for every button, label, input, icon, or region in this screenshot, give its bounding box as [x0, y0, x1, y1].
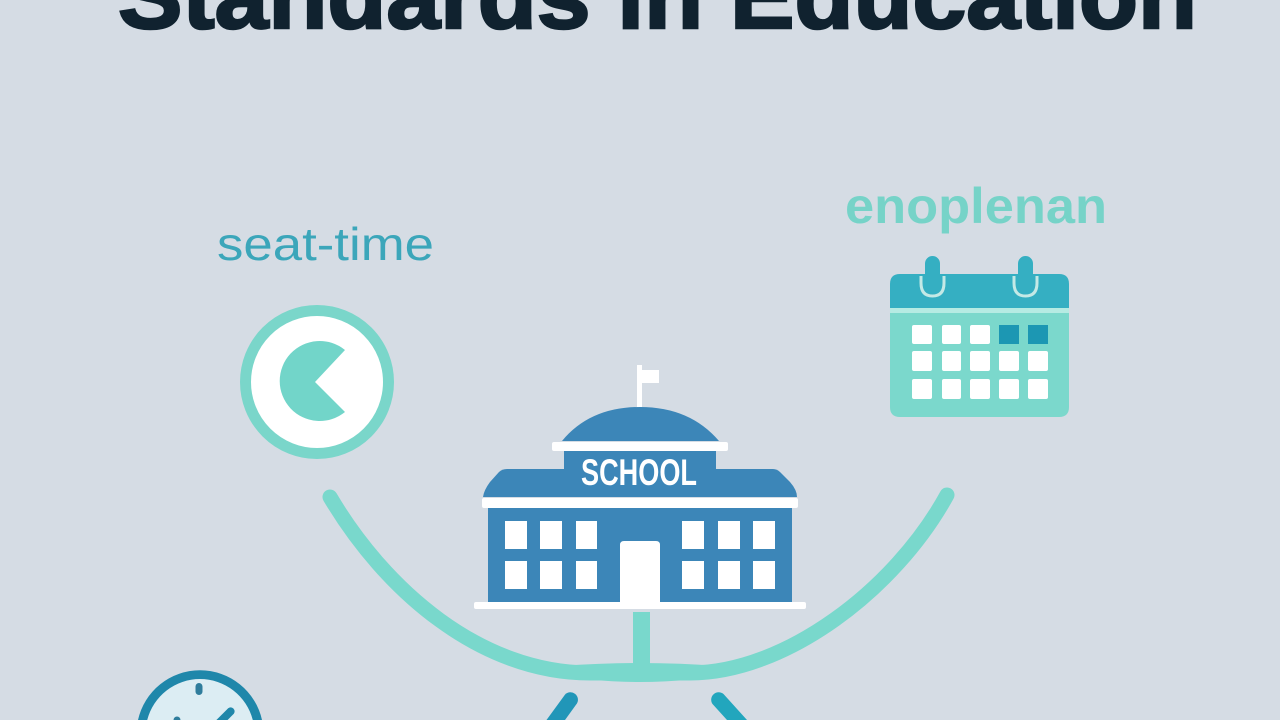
- icon: school building: [474, 365, 806, 609]
- arrow: lower left: [546, 692, 578, 720]
- icon: wall clock, cropped: [138, 670, 262, 720]
- arrow: lower right: [711, 692, 747, 720]
- balance arc: [330, 495, 947, 682]
- icon: calendar: [890, 256, 1069, 417]
- building sign: SCHOOL: SCHOOL: [581, 452, 697, 493]
- icon: seat-time clock: [246, 310, 388, 454]
- label: employment: enoplenan: [845, 178, 1107, 234]
- label: seat-time: seat-time: [217, 218, 434, 270]
